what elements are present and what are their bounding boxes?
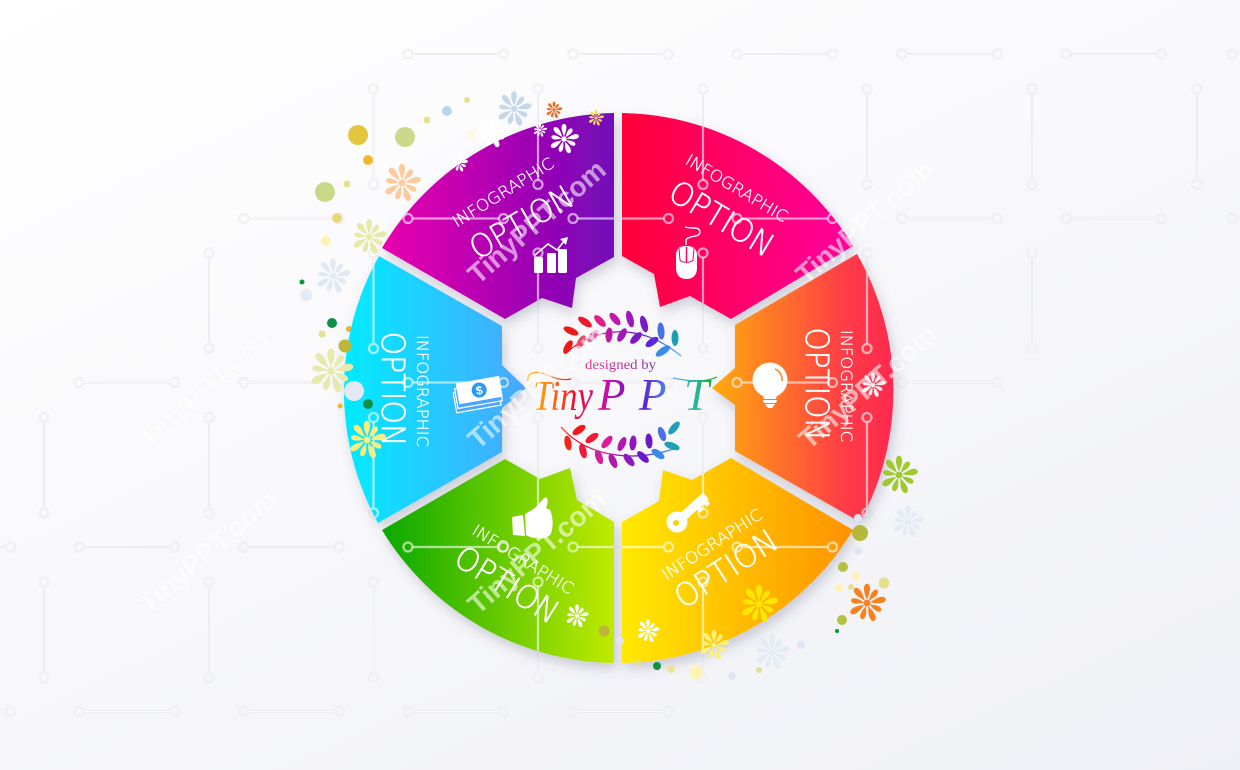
heading: orange option [798,328,856,442]
heading: orange option: INFOGRAPHIC [837,330,856,442]
segment: purple [382,113,614,319]
option wheel [344,113,893,663]
watermarks [133,154,943,620]
icon: rising bar chart [534,237,568,273]
watermarks: TinyPPT.com [133,484,283,620]
logo: designed by: designed by [585,358,656,373]
segment: blue [344,256,526,523]
logo: bottom laurel branch [561,420,682,469]
logo: TinyPPT wordmark [528,370,717,420]
watermarks: TinyPPT.com [462,484,612,620]
background dots upper left [300,97,470,408]
heading: blue option: INFOGRAPHIC [413,335,432,447]
heading: blue option [374,332,432,447]
segment: orange [712,254,893,522]
heading: yellow option: INFOGRAPHIC [658,505,766,584]
background flowers upper left [316,91,563,294]
icon: banknotes: $ [475,383,484,398]
dots over wheel and lower right [338,130,890,680]
icon: light bulb [752,362,788,408]
heading: purple option: OPTION [463,178,580,267]
icon: banknotes [452,376,504,413]
logo: TinyPPT wordmark: P [638,370,666,420]
watermarks: TinyPPT.com [790,154,940,290]
watermarks: TinyPPT.com [133,319,283,455]
heading: pink option: OPTION [662,172,781,265]
logo: TinyPPT wordmark: Tiny [533,374,593,420]
icon: thumbs up [512,498,553,538]
heading: pink option: INFOGRAPHIC [682,150,791,226]
flowers over wheel [310,110,924,670]
logo: TinyPPT wordmark: T [684,370,712,420]
watermarks: TinyPPT.com [462,319,612,455]
heading: orange option: OPTION [798,328,836,440]
center logo [528,310,717,469]
heading: green option: INFOGRAPHIC [469,521,577,598]
heading: purple option: INFOGRAPHIC [449,154,557,231]
grid overlay on wheel [318,125,918,670]
segment: yellow [622,458,853,663]
heading: blue option: OPTION [374,332,412,446]
logo: TinyPPT wordmark: P [597,370,626,420]
icon: computer mouse [676,227,700,279]
segment: green [382,459,614,663]
icon: key [662,488,713,537]
watermarks: TinyPPT.com [462,154,612,290]
segment: pink [622,113,853,319]
watermarks: TinyPPT.com [793,319,943,455]
logo: top laurel branch [561,310,681,359]
heading: yellow option: OPTION [667,521,785,616]
heading: green option: OPTION [448,538,566,632]
